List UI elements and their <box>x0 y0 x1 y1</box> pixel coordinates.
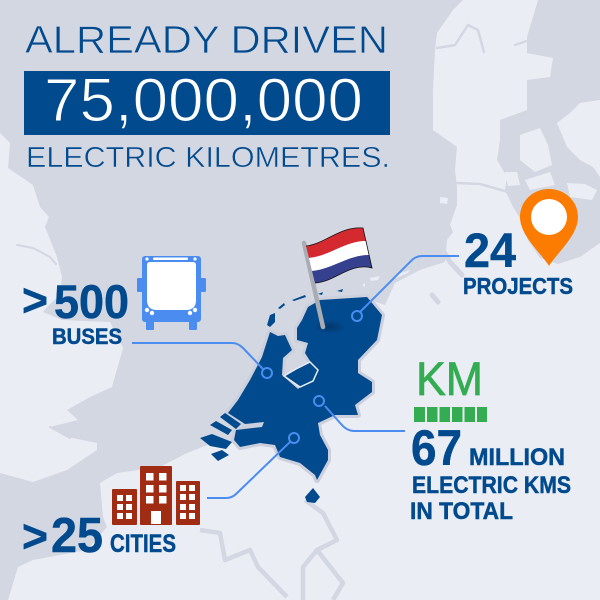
connector: buses <box>132 343 272 378</box>
stat: kilometres: ELECTRIC KMS <box>412 472 571 499</box>
connector: kilometres <box>314 396 405 431</box>
stat: projects <box>463 225 573 299</box>
stat: cities: 25 <box>51 509 103 563</box>
stat: kilometres: IN TOTAL <box>410 498 513 525</box>
stat: cities: CITIES <box>110 530 176 558</box>
icon: city buildings <box>112 466 200 525</box>
borders <box>200 500 343 600</box>
stat: buses: > <box>22 274 48 326</box>
headline: already driven: ALREADY DRIVEN <box>25 19 388 62</box>
islands <box>267 289 343 327</box>
stat: cities: > <box>22 510 48 562</box>
connector: cities <box>207 433 299 498</box>
connector: projects <box>352 256 459 321</box>
Flevoland <box>284 362 318 387</box>
headline: electric kilometres: ELECTRIC KILOMETRES. <box>26 142 390 174</box>
stat: buses: BUSES <box>52 324 122 349</box>
icon: bus <box>137 256 206 330</box>
icon: KM battery: KM <box>416 352 483 405</box>
stat: buses: 500 <box>54 275 129 328</box>
icon: location pin <box>520 189 578 266</box>
stat: kilometres <box>410 420 571 525</box>
stat: projects: 24 <box>464 225 516 278</box>
icon: Dutch flag <box>304 228 372 327</box>
stat: cities <box>22 509 176 563</box>
sandbanks <box>362 270 410 287</box>
stat: kilometres: MILLION <box>469 444 565 471</box>
stat: buses <box>22 274 129 349</box>
flag pole shadow <box>314 320 346 334</box>
map of the Netherlands <box>200 289 382 503</box>
headline box: 75,000,000: 75,000,000 <box>44 66 363 134</box>
stat: kilometres: 67 <box>411 420 462 476</box>
stat: projects: PROJECTS <box>463 273 573 299</box>
